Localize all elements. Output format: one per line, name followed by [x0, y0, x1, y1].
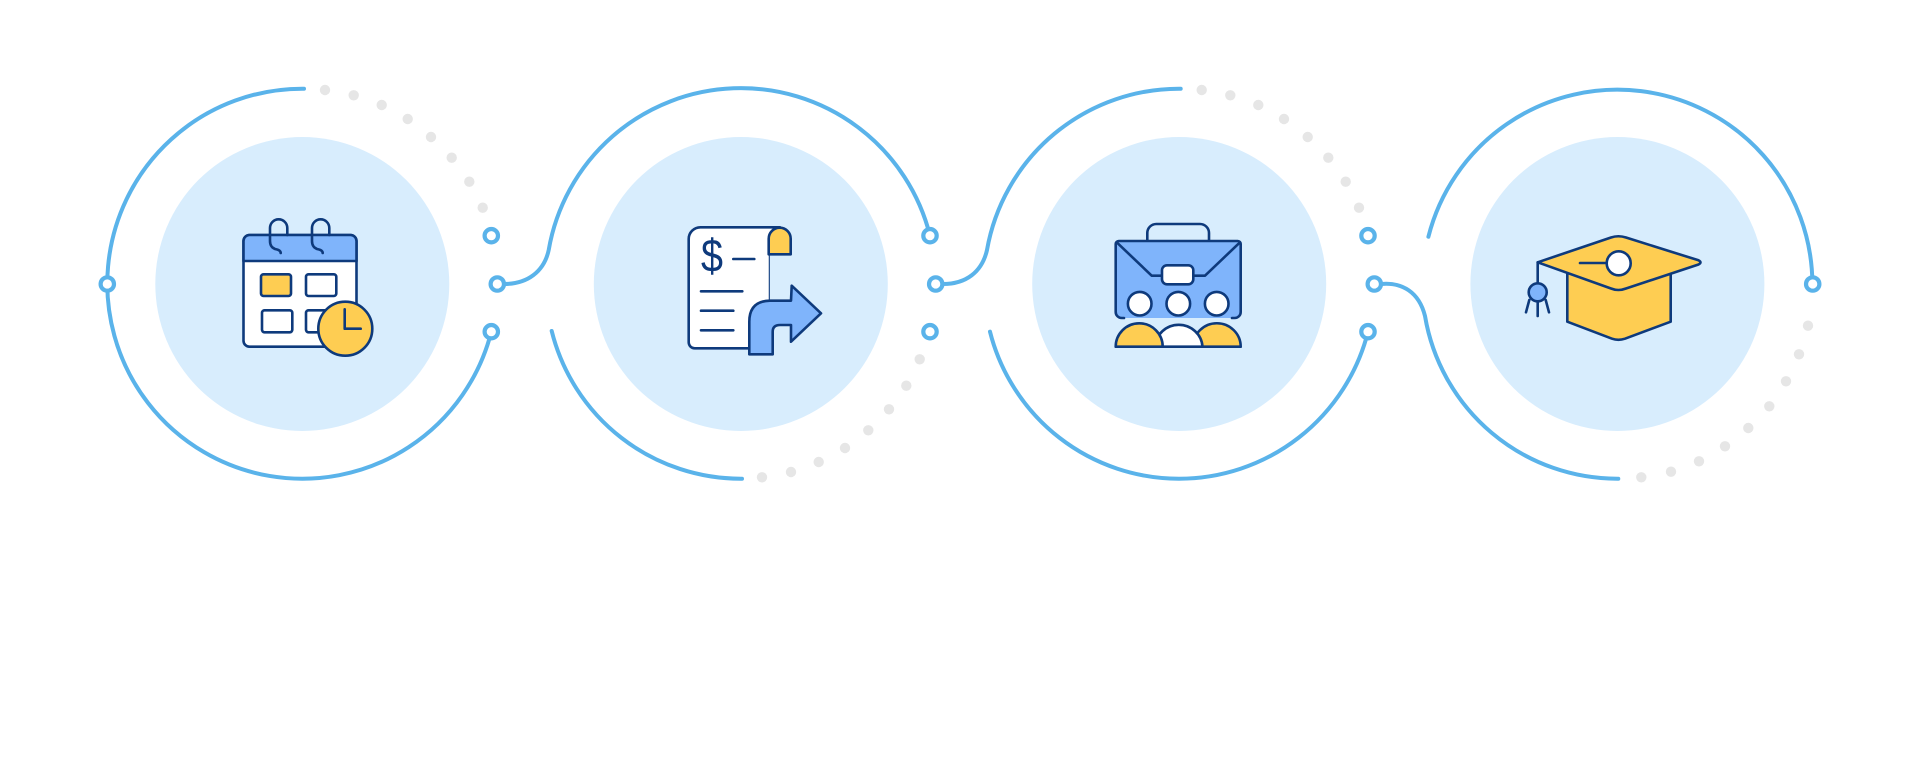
upper ring arc 4 [1428, 90, 1812, 284]
ring nodes 1 [101, 229, 498, 338]
ring nodes 3 [929, 229, 1375, 338]
ring nodes 2 [491, 229, 937, 338]
panel: step 2 invoice [491, 88, 937, 482]
panel: step 3 briefcase team [929, 85, 1375, 479]
icon: invoice with redirect arrow [689, 227, 821, 354]
icon: calendar with clock [244, 219, 372, 356]
background disc 2 [594, 137, 888, 431]
panel: step 4 graduation [1368, 90, 1819, 482]
dotted arc 4 [1636, 320, 1813, 482]
connector and upper ring arc 2 [504, 88, 930, 284]
background disc 4 [1470, 137, 1764, 431]
ring arc 1 [107, 89, 491, 479]
connector and upper ring arc 3 [943, 89, 1181, 284]
connector and lower ring arc 4 [1381, 284, 1618, 479]
lower ring arc 3 [990, 332, 1368, 479]
dotted arc 3 [1196, 85, 1364, 213]
icon: invoice with redirect arrow: $ [701, 229, 723, 281]
background disc 1 [155, 137, 449, 431]
dotted arc 2 [757, 354, 925, 482]
dotted arc 1 [320, 85, 488, 213]
icon: briefcase with team [1116, 224, 1241, 347]
icon: graduation cap [1526, 236, 1700, 340]
background disc 3 [1032, 137, 1326, 431]
ring nodes 4 [1368, 277, 1819, 291]
panel: step 1 schedule [101, 85, 498, 479]
lower ring arc 2 [552, 331, 742, 479]
